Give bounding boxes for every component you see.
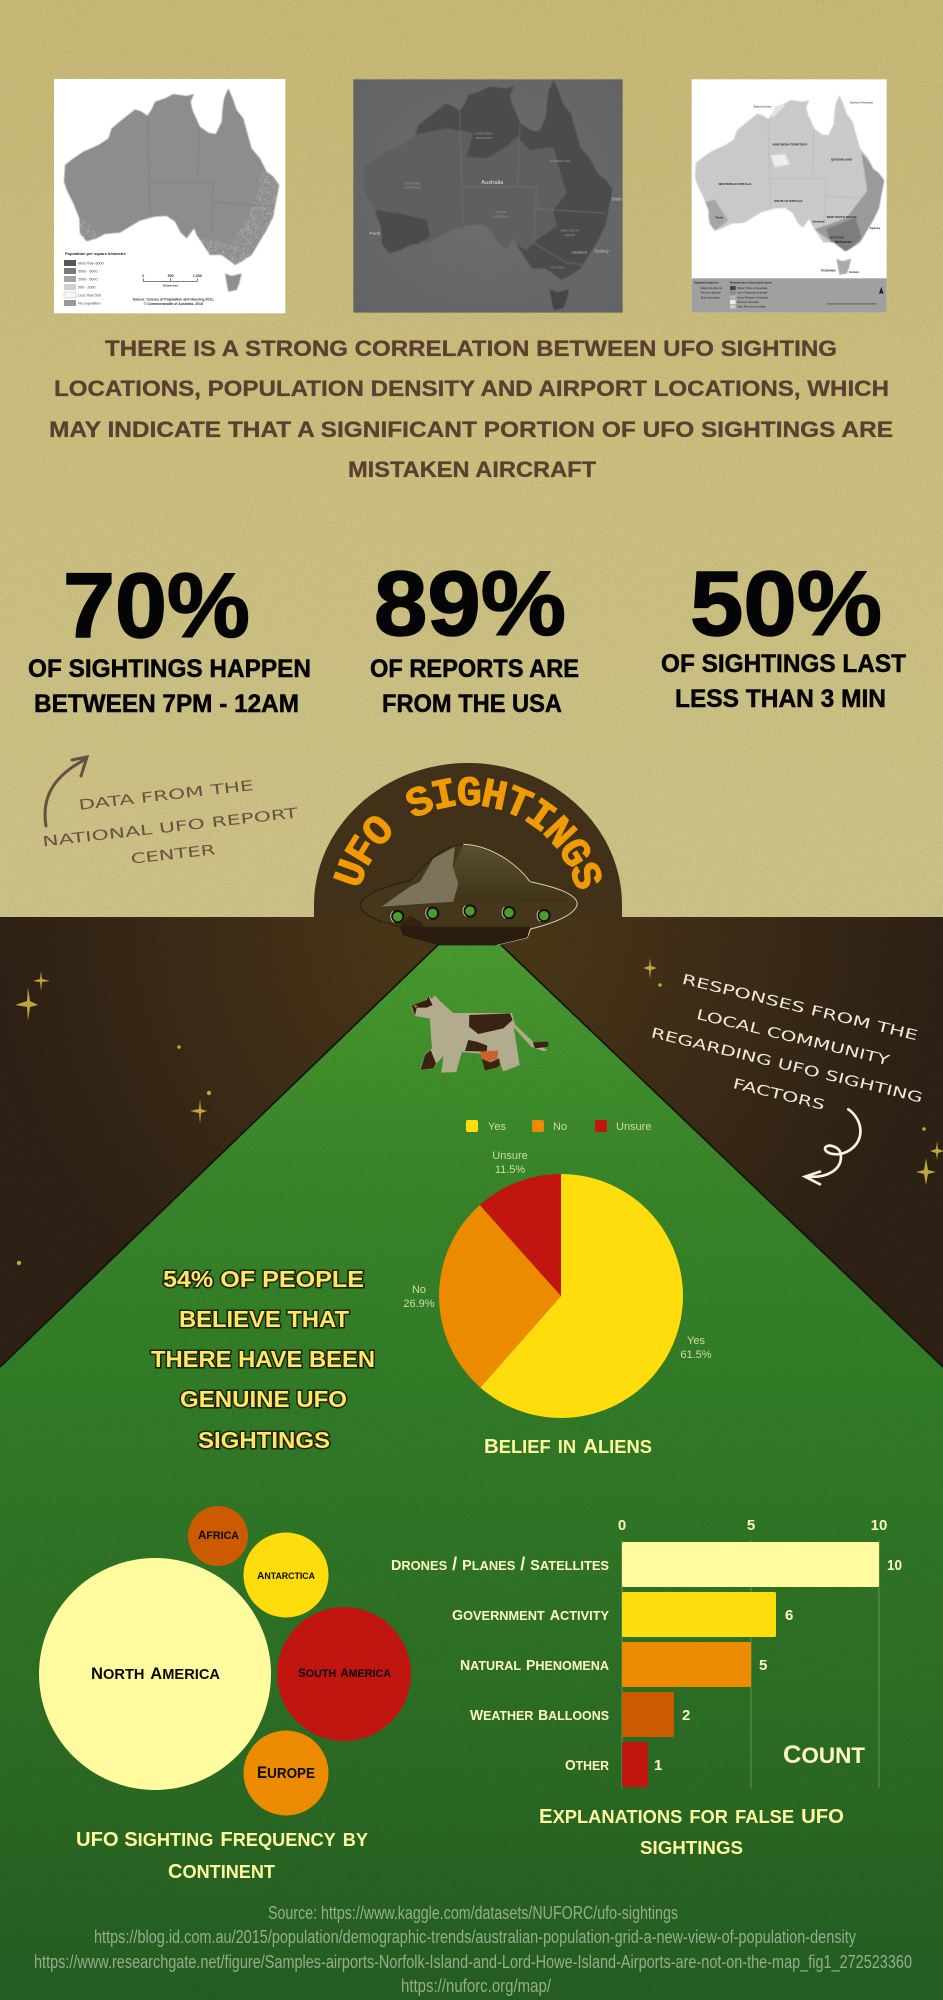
bar chart: explanations: 1 — [654, 1757, 662, 1774]
map: airports: SOUTH AUSTRALIA — [774, 199, 803, 203]
map: airports: NEW SOUTH WALES — [827, 215, 856, 219]
map: UFO sightings dark map: TERRITORY — [475, 136, 493, 140]
bar chart title — [539, 1801, 844, 1860]
bar chart title: Explanations for false UFO — [539, 1801, 844, 1829]
map: airports: Perth — [716, 216, 723, 220]
arrow: swirl down to chart — [805, 1109, 860, 1184]
bar chart title: sightings — [640, 1832, 743, 1860]
sources: https://nuforc.org/map/ — [401, 1976, 551, 1996]
stat: 50%: OF SIGHTINGS LAST — [661, 650, 906, 678]
map: airports: Very Remote Australia — [737, 305, 766, 309]
map: airports: Major Cities of Australia — [737, 286, 767, 290]
map: airports: NORTHERN TERRITORY — [773, 142, 807, 146]
correlation statement: MISTAKEN AIRCRAFT — [348, 457, 597, 482]
pie legend: No — [553, 1121, 567, 1133]
stat: 89% — [370, 553, 579, 718]
icon: flying saucer — [360, 844, 577, 945]
stat: 89%: OF REPORTS ARE — [370, 655, 579, 683]
stat: 50%: LESS THAN 3 MIN — [675, 685, 886, 713]
pie legend: Yes — [488, 1121, 506, 1133]
bubble chart: continents: Europe — [257, 1759, 315, 1783]
note: data source: NATIONAL UFO REPORT — [42, 805, 299, 850]
stat: 50%: 50% — [690, 553, 882, 655]
map: UFO sightings dark map: AUSTRALIA — [492, 215, 509, 219]
bubble chart: continents — [39, 1506, 411, 1816]
map: airports — [692, 79, 887, 313]
arrow: up to data — [45, 757, 87, 826]
map: population density: No population — [78, 301, 101, 305]
callout: 54% believe: 54% OF PEOPLE — [163, 1266, 364, 1292]
bubble chart title: UFO Sighting Frequency by — [76, 1824, 368, 1852]
callout: 54% believe: THERE HAVE BEEN — [151, 1346, 375, 1372]
map: airports: TASMANIA — [821, 268, 837, 272]
stat: 89%: 89% — [374, 553, 566, 655]
bar chart: explanations: Weather Balloons — [470, 1704, 609, 1724]
map: airports: Sydney — [870, 226, 881, 230]
note: data source: CENTER — [130, 842, 217, 868]
pie title: Belief in Aliens — [484, 1431, 652, 1459]
map: population density: 0 — [142, 274, 144, 278]
note: data source: DATA FROM THE — [78, 778, 254, 814]
callout: 54% believe: BELIEVE THAT — [179, 1306, 349, 1332]
stat: 70%: BETWEEN 7PM - 12AM — [34, 690, 299, 718]
bar chart: explanations: Count — [783, 1735, 866, 1770]
pie legend: Unsure — [616, 1121, 651, 1133]
pie chart: belief in aliens: 26.9% — [403, 1298, 435, 1310]
map: UFO sightings dark map: Canberra — [572, 251, 588, 255]
icon: cow — [412, 996, 548, 1072]
map: airports: Sampled airports — [694, 281, 719, 285]
note: community responses: FACTORS — [731, 1076, 826, 1114]
callout: 54% believe: SIGHTINGS — [198, 1427, 330, 1453]
map: population density: Kilometres — [163, 284, 179, 288]
dome behind saucer — [314, 763, 622, 917]
stat: 50% — [661, 553, 906, 713]
sources — [34, 1903, 912, 1996]
map: population density: Source: Census of Population and Housing 2011, — [133, 297, 214, 301]
pie legend — [466, 1120, 651, 1133]
note: community responses: LOCAL COMMUNITY — [695, 1007, 892, 1069]
note: data source — [42, 778, 299, 868]
map: UFO sightings dark map: NEW SOUTH — [561, 228, 579, 232]
green tractor beam — [0, 943, 943, 2000]
map: airports: QUEENSLAND — [831, 158, 853, 162]
pie chart: belief in aliens: No — [412, 1284, 426, 1296]
pie chart: belief in aliens — [403, 1150, 712, 1418]
callout: 54% believe: GENUINE UFO — [180, 1386, 347, 1412]
stars right — [643, 958, 943, 1185]
map: population density: 500 - 2000 — [78, 285, 95, 289]
pie chart: belief in aliens: Yes — [687, 1335, 705, 1347]
callout: 54% believe — [151, 1266, 375, 1453]
map: airports: State boundary — [701, 295, 720, 299]
map: airports: Regional airports — [701, 286, 723, 290]
map: population density: Population per square kilometre — [65, 251, 127, 256]
bubble chart title: Continent — [168, 1856, 275, 1884]
bar chart: explanations: 5 — [759, 1657, 767, 1674]
map: UFO sightings dark map: Sydney — [594, 248, 610, 253]
map: UFO sightings dark map: Brisb — [612, 197, 622, 202]
map: airports: Melbourne — [835, 240, 852, 244]
note: community responses — [649, 972, 924, 1114]
pie chart: belief in aliens: Unsure — [492, 1150, 528, 1162]
bar chart: explanations: 5 — [747, 1517, 755, 1534]
map: population density: 500 — [168, 274, 174, 278]
bar chart: explanations: 2 — [682, 1707, 690, 1724]
bubble chart title — [76, 1824, 368, 1884]
stat: 70%: OF SIGHTINGS HAPPEN — [28, 655, 311, 683]
correlation statement: MAY INDICATE THAT A SIGNIFICANT PORTION OF UFO SIGHTINGS ARE — [49, 417, 893, 442]
pie chart: belief in aliens: 61.5% — [680, 1349, 712, 1361]
correlation statement: THERE IS A STRONG CORRELATION BETWEEN UFO SIGHTING — [105, 336, 837, 361]
map: airports: VICTORIA — [830, 236, 845, 240]
bar chart: explanations: 0 — [618, 1517, 626, 1534]
correlation statement — [49, 336, 893, 482]
map: airports: Inner Regional Australia — [737, 291, 768, 295]
map: population density: Less than 500 — [78, 293, 101, 297]
bar chart: explanations: Other — [565, 1754, 610, 1774]
map: UFO sightings dark map: WESTERN — [405, 181, 420, 185]
note: community responses: RESPONSES FROM THE — [680, 972, 919, 1044]
map: airports: Bathurst Island — [754, 104, 772, 108]
map: population density: 5000 - 6000 — [78, 269, 98, 273]
map: UFO sightings dark map: Perth — [369, 231, 381, 236]
dark ground — [0, 917, 943, 2000]
bubble chart: continents: Africa — [198, 1526, 239, 1543]
bar chart: explanations — [391, 1517, 902, 1788]
map: population density: 2000 - 5000 — [78, 277, 98, 281]
bar chart: explanations: 6 — [785, 1607, 793, 1624]
map: UFO sightings dark map: SOUTH — [495, 210, 506, 214]
pie chart: belief in aliens: 11.5% — [495, 1164, 525, 1176]
map: airports: Adelaide — [812, 220, 825, 224]
map: population density: © Commonwealth of Australia, 2018 — [144, 302, 203, 306]
bubble chart: continents: South America — [298, 1664, 391, 1681]
correlation statement: LOCATIONS, POPULATION DENSITY AND AIRPORT LOCATIONS, WHICH — [54, 376, 889, 401]
map: UFO sightings dark map — [353, 71, 629, 313]
bar chart: explanations: Government Activity — [452, 1604, 609, 1624]
map: airports: Remote airports — [701, 291, 721, 295]
bar chart: explanations: Natural Phenomena — [460, 1654, 610, 1674]
stars left — [15, 971, 211, 1265]
map: population density: More than 6000 — [78, 261, 104, 265]
map: airports: Northern Peninsula — [850, 100, 873, 104]
map: airports: Remoteness (structure) areas — [730, 281, 772, 285]
map: UFO sightings dark map: QUEENSLAND — [550, 159, 571, 163]
map: UFO sightings dark map: WALES — [565, 233, 575, 237]
map: population density: 1,000 — [193, 274, 202, 278]
map: airports: WESTERN AUSTRALIA — [719, 182, 752, 186]
title curved: UFO SIGHTINGS — [333, 776, 602, 889]
stat: 70%: 70% — [63, 555, 250, 657]
bubble chart: continents: Antarctica — [257, 1567, 315, 1582]
sources: Source: https://www.kaggle.com/datasets/NUFORC/ufo-sightings — [268, 1903, 678, 1923]
bar chart: explanations: 10 — [887, 1557, 902, 1574]
map: UFO sightings dark map: AUSTRALIA — [404, 186, 421, 190]
map: UFO sightings dark map: Australia — [481, 180, 504, 186]
map: airports: Hobart — [849, 270, 859, 274]
background paper — [0, 0, 943, 917]
map: UFO sightings dark map: VICTORIA — [550, 265, 564, 269]
map: UFO sightings dark map: NORTHERN — [476, 131, 492, 135]
stat: 89%: FROM THE USA — [382, 690, 562, 718]
map: airports: Outer Regional Australia — [737, 295, 768, 299]
stat: 70% — [28, 555, 311, 718]
map: population density — [54, 79, 285, 313]
bar chart: explanations: Drones / Planes / Satellites — [391, 1554, 609, 1574]
bar chart: explanations: 10 — [871, 1517, 887, 1534]
bubble chart: continents: North America — [91, 1660, 220, 1684]
note: community responses: REGARDING UFO SIGHTING — [649, 1025, 924, 1107]
map: airports: Remote Australia — [737, 300, 759, 304]
